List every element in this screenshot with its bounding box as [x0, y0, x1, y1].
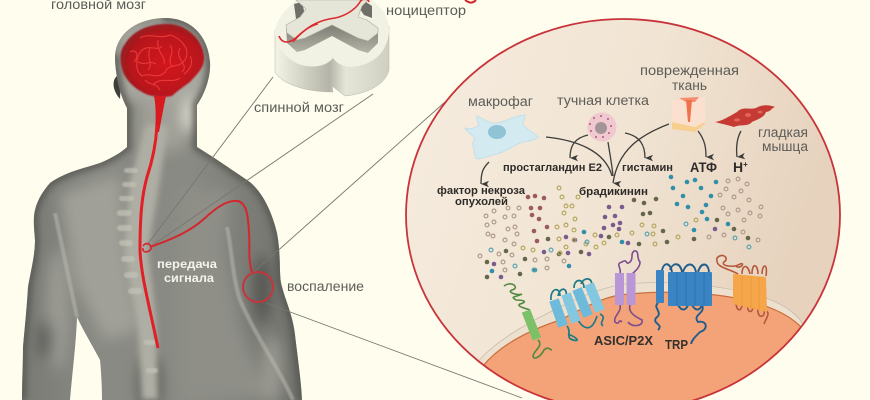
label: signal transmission: сигнала	[164, 271, 214, 285]
label: signal transmission: передача	[157, 257, 217, 271]
label: TNF	[437, 185, 526, 208]
inflammation ring	[243, 272, 273, 302]
icon: smooth muscle	[715, 105, 775, 127]
receptor: green	[504, 284, 552, 358]
grey matter H	[286, 0, 378, 41]
receptor: light blue	[551, 279, 603, 341]
body rim shading	[22, 18, 302, 400]
cell with membrane	[475, 283, 806, 400]
spinal nerve line	[140, 96, 166, 348]
receptor: TRP	[655, 264, 712, 344]
label: prostaglandin E2: простагландин Е2	[503, 162, 602, 174]
label: histamine: гистамин	[622, 162, 673, 174]
nociceptor mark	[465, 0, 476, 3]
hollow dots: teal	[489, 222, 751, 272]
label: damaged tissue	[640, 63, 739, 93]
filled dots: teal	[490, 175, 730, 273]
icon: damaged tissue	[672, 97, 705, 132]
label: TNF: опухолей	[455, 196, 508, 208]
icon: macrophage	[465, 115, 538, 159]
label: ATP: АТФ	[690, 159, 717, 175]
label: nociceptor: ноцицептор	[386, 3, 466, 18]
cell labels	[468, 63, 808, 154]
label: TNF: фактор некроза	[437, 185, 526, 197]
label: smooth muscle: гладкая	[758, 125, 808, 140]
hollow dots: gold	[521, 186, 698, 255]
label: damaged tissue: поврежденная	[640, 63, 739, 78]
label: bradykinin: брадикинин	[579, 186, 648, 198]
filled dots: purple	[492, 205, 717, 279]
label: TRP: TRP	[665, 338, 688, 352]
label: smooth muscle: мышца	[762, 139, 808, 154]
arm highlights	[55, 213, 293, 400]
peripheral nerve line	[143, 201, 252, 272]
label: spinal cord: спинной мозг	[254, 100, 344, 115]
label: smooth muscle	[758, 125, 808, 154]
back torso	[22, 18, 302, 400]
ears	[114, 74, 202, 103]
circle outline	[406, 19, 840, 400]
pointer lines	[147, 77, 522, 398]
arrows	[481, 124, 741, 184]
top face	[275, 0, 389, 67]
outer wall	[275, 26, 389, 96]
signal molecule dots	[478, 175, 763, 279]
nociceptor fibre	[279, 0, 369, 42]
spinal cord section	[275, 0, 389, 96]
groove wall	[286, 25, 378, 53]
label: signal transmission	[157, 257, 217, 285]
receptor: ASIC/P2X	[615, 251, 642, 326]
mediator labels	[437, 159, 748, 208]
label: H+: +	[743, 160, 748, 169]
human figure	[22, 18, 302, 400]
label: macrophage: макрофаг	[468, 94, 533, 109]
label: ASIC/P2X: ASIC/P2X	[594, 334, 654, 348]
icon: mast cell	[588, 112, 616, 142]
spine column	[124, 125, 168, 400]
filled dots: olive	[485, 197, 750, 279]
magnified circle panel	[406, 19, 840, 400]
receptor: orange	[717, 255, 768, 324]
label: H+: Н	[733, 159, 743, 175]
dorsal pockets	[294, 2, 372, 19]
brain	[121, 24, 204, 97]
label: mast cell: тучная клетка	[557, 93, 650, 108]
filled dots: maroon	[526, 194, 549, 243]
hollow dots: tan	[478, 177, 763, 272]
label: inflammation: воспаление	[287, 279, 364, 294]
label: damaged tissue: ткань	[672, 78, 707, 93]
